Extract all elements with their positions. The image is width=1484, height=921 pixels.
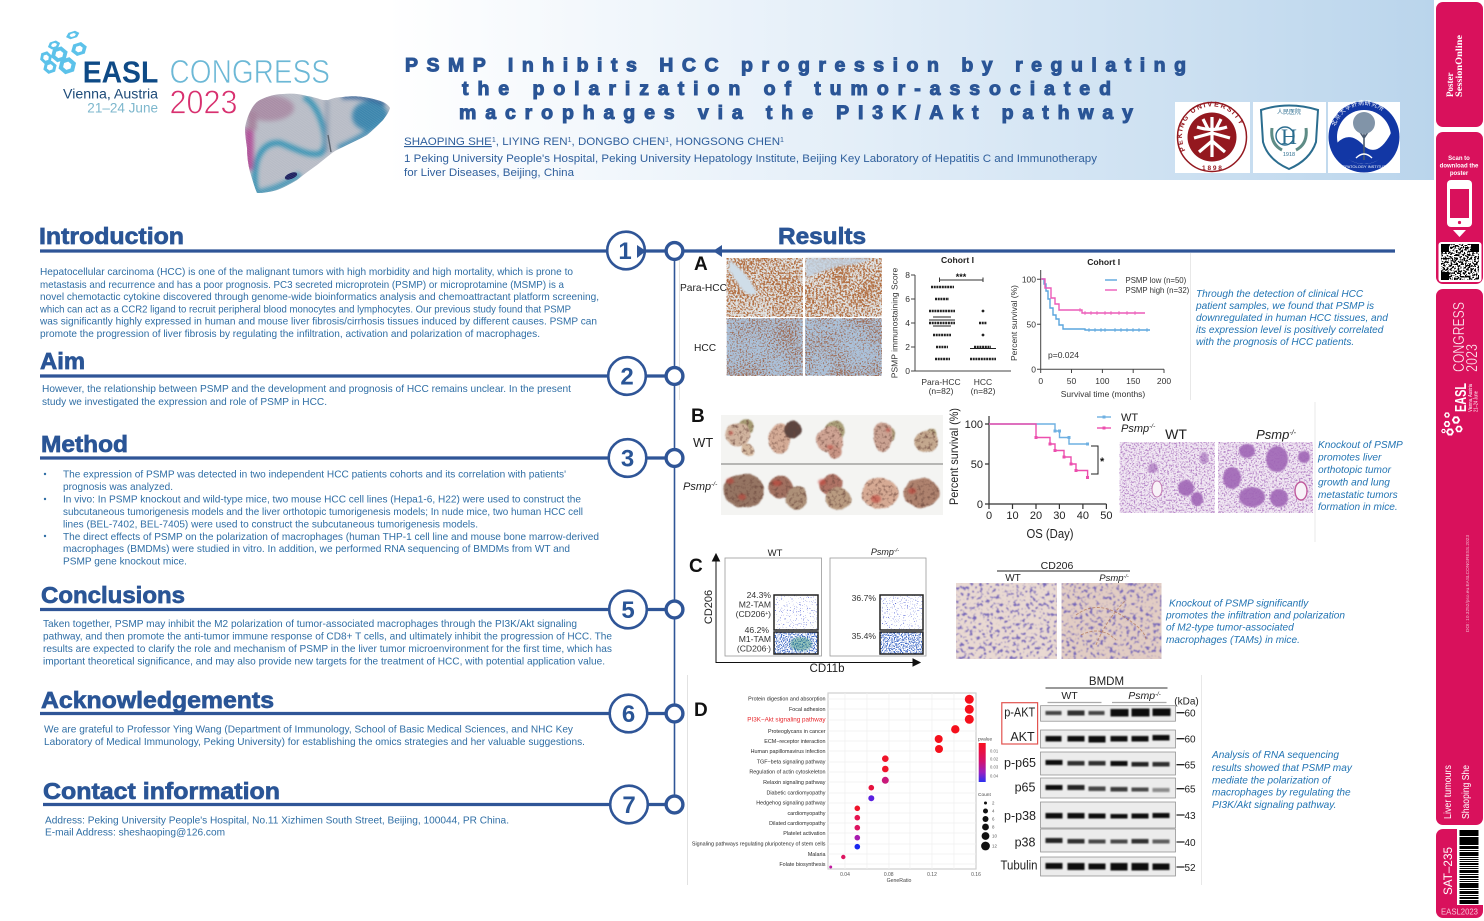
flow cytometry plots: ) — [768, 609, 771, 619]
survival chart: OS: -/- — [1149, 423, 1156, 430]
heading: conclusions: Conclusions — [41, 582, 185, 608]
IHC micrographs: Para-HCC — [680, 283, 727, 294]
sidebar panel: congress and session: Liver tumours — [1443, 765, 1454, 819]
p-p65 bands — [1046, 760, 1062, 765]
text: result A note: its expression level is positively correlated — [1196, 325, 1384, 336]
flow cytometry plots: Psmp — [871, 547, 894, 557]
CD206 micrographs: CD206 — [1041, 560, 1074, 572]
title: the polarization of tumor-associated — [462, 78, 1111, 100]
sidebar panel: congress and session: Vienna, Austria — [1468, 384, 1474, 412]
text: result C note: Knockout of PSMP significantly — [1169, 598, 1309, 610]
panel: aim — [40, 348, 571, 408]
survival chart: cohort I: p=0.024 — [1048, 350, 1079, 360]
panel: contact information — [43, 778, 509, 838]
panel: result A — [680, 253, 1388, 400]
text: method bullets: The expression of PSMP was detected in two independent HCC patients cohorts and its correlation with patients' — [63, 470, 566, 480]
text: conclusions body: pathway, and then promote the anti-tumor immune response of CD8+ T cells, and ultimately inhibit the progression of HCC. The — [43, 632, 612, 642]
CD206 micrographs: WT — [1005, 573, 1021, 584]
text: result A note — [1195, 289, 1388, 348]
KEGG bubble chart: Platelet activation — [783, 831, 826, 837]
dot plot: immunostaining score: *** — [956, 272, 967, 282]
text: result D note: PI3K/Akt signaling pathway. — [1212, 800, 1336, 811]
text: conclusions body: results are expected to clarify the role and mechanism of PSMP in the liver tumor microenvironment for the first time, which has — [43, 644, 612, 655]
survival chart: cohort I: 0 — [1038, 376, 1043, 386]
marker 2 — [608, 357, 683, 395]
CD206 micrographs — [956, 560, 1162, 659]
text: result D note: mediate the polarization of — [1212, 776, 1332, 786]
text: acknowledgements body: We are grateful to Professor Ying Wang (Department of Immunology, School of Basic Medical Sciences, and NHC Key — [44, 724, 574, 736]
survival chart: OS: 100 — [965, 419, 983, 431]
text: conclusions body — [43, 619, 612, 668]
dot plot: immunostaining score: Para-HCC — [921, 377, 961, 387]
western blots: p65 — [1015, 780, 1035, 794]
KEGG bubble chart: ECM−receptor interaction — [764, 739, 826, 745]
KEGG bubble chart: Diabetic cardiomyopathy — [766, 790, 826, 796]
survival chart: cohort I: 200 — [1157, 376, 1171, 386]
affiliation: for Liver Diseases, Beijing, China — [404, 167, 574, 179]
text: aim body — [42, 384, 571, 408]
western blots — [1000, 676, 1199, 876]
text: result B note: promotes liver — [1317, 452, 1382, 464]
authors: 1 — [492, 137, 496, 144]
connector lines and timeline — [40, 251, 1395, 804]
text: method bullets: prognosis was analyzed. — [63, 482, 173, 493]
marker 2: 2 — [620, 364, 634, 390]
flow cytometry plots: 35.4% — [852, 631, 876, 641]
text: result B note: formation in mice. — [1318, 502, 1398, 513]
lung histology — [1120, 426, 1313, 513]
western blots: WT — [1061, 690, 1078, 702]
authors: 1 — [780, 137, 784, 144]
KEGG bubble chart: Focal adhesion — [789, 707, 826, 713]
text: method bullets: In vivo: In PSMP knockout and wild-type mice, two mouse HCC cell lines (Hepa1-6, H22) were used to construct the — [63, 494, 581, 506]
text: result D note — [1211, 750, 1353, 811]
authors: SHAOPING SHE — [404, 136, 492, 148]
text: contact body: Address: Peking University People's Hospital, No.11 Xizhimen South Street, Beijing, 100044, PR China. — [45, 816, 509, 826]
sidebar panel: scan to download — [1436, 132, 1483, 284]
heading: contact information: Contact information — [43, 778, 280, 804]
survival chart: cohort I: 100 — [1022, 274, 1036, 284]
text: result B note: orthotopic tumor — [1318, 465, 1392, 476]
KEGG bubble chart: Count — [978, 792, 991, 798]
p38 bands — [1046, 838, 1062, 843]
flow cytometry plots: 24.3% — [747, 590, 771, 600]
western blots: Tubulin — [1000, 858, 1038, 872]
marker 1: 1 — [618, 238, 632, 265]
sidebar panel: congress and session: DOI: 10.3252/pso.eu.EASLCONGRESS.2023 — [1465, 535, 1470, 632]
dot plot: immunostaining score: 6 — [905, 294, 910, 304]
dot plot: immunostaining score: 0 — [905, 366, 910, 376]
sidebar panel: congress and session: EASL — [1453, 383, 1470, 412]
flow cytometry plots: - — [766, 646, 768, 652]
dot plot: immunostaining score: (n=82) — [971, 386, 996, 396]
KEGG bubble chart: Dilated cardiomyopathy — [769, 821, 826, 827]
marker 5 — [609, 591, 683, 628]
survival chart: cohort I: 50 — [1067, 376, 1076, 386]
AKT bands — [1046, 736, 1062, 742]
KEGG bubble chart: Malaria — [808, 852, 826, 858]
heading: introduction: Introduction — [39, 223, 184, 249]
flow cytometry plots: CD11b — [810, 663, 844, 675]
flow cytometry plots: -/- — [894, 548, 899, 554]
marker 5: 5 — [621, 597, 635, 624]
panel: result D — [688, 675, 1353, 885]
text: method bullets: The direct effects of PSMP on the polarization of macrophages (human THP-1 cell line and mouse bone marrow-derived — [63, 532, 599, 543]
sidebar panel: poster session online — [1436, 2, 1483, 127]
survival chart: OS: 10 — [1006, 510, 1019, 522]
text: method bullets — [44, 470, 599, 568]
title: macrophages via the PI3K/Akt pathway — [459, 102, 1133, 124]
text: result C note: macrophages (TAMs) in mice. — [1166, 635, 1300, 646]
panel: introduction — [39, 223, 599, 340]
icon: People's Hospital shield: 1918 — [1283, 152, 1295, 158]
western blots: BMDM — [1089, 676, 1124, 688]
EASL Congress logo: Vienna, Austria — [63, 86, 159, 101]
KEGG bubble chart: Human papillomavirus infection — [751, 749, 826, 755]
EASL Congress logo: 2023 — [170, 83, 238, 120]
icon: Hepatology Institute seal: HEPATOLOGY INSTITUTE — [1340, 164, 1389, 169]
text: result D note: macrophages by regulating the — [1212, 788, 1351, 798]
arrow: results pointer — [713, 245, 722, 257]
section markers — [607, 232, 683, 823]
label B: B — [691, 406, 705, 427]
survival chart: OS: 30 — [1053, 510, 1066, 522]
sidebar panel: scan to download: poster — [1450, 171, 1469, 177]
KEGG bubble chart: Signaling pathways regulating pluripotency of stem cells — [692, 842, 826, 848]
heading: results: Results — [778, 223, 866, 249]
text: contact body: E-mail Address: sheshaoping@126.com — [45, 828, 225, 838]
EASL Congress logo: EASL — [83, 54, 158, 90]
text: conclusions body: Taken together, PSMP may inhibit the M2 polarization of tumor-associated macrophages through the PI3K/Akt signaling — [43, 619, 577, 630]
text: result A note: with the prognosis of HCC patients. — [1196, 337, 1354, 348]
panel: conclusions — [41, 582, 612, 668]
flow cytometry plots: ) — [768, 644, 771, 654]
authors — [404, 136, 784, 148]
survival chart: cohort I — [1009, 257, 1190, 399]
KEGG bubble chart: 6 — [992, 816, 995, 822]
sidebar panel: poster number and barcode — [1436, 827, 1484, 918]
icon: phone — [1447, 180, 1472, 227]
p65 bands — [1046, 785, 1062, 790]
text: introduction body: metastasis and recurrence and has a poor prognosis. PC3 secreted microprotein (PSMP) or microprotamine (MSMP) is a — [40, 280, 564, 291]
marker 6: 6 — [622, 701, 635, 728]
text: introduction body: promote the progression of liver fibrosis by regulating the infiltration, activation and polarization of macrophages. — [40, 329, 540, 340]
p-AKT bands — [1046, 711, 1062, 715]
KEGG bubble chart: Regulation of actin cytoskeleton — [749, 770, 826, 776]
text: result C note — [1165, 598, 1345, 646]
survival chart: cohort I: PSMP high (n=32) — [1126, 286, 1190, 295]
EASL Congress logo: 21–24 June — [87, 100, 158, 115]
icon: People's Hospital shield: 人民医院 — [1277, 108, 1301, 116]
survival chart: cohort I: 50 — [1027, 320, 1036, 330]
western blots: Psmp — [1128, 690, 1155, 702]
flow cytometry plots: 46.2% — [745, 625, 769, 635]
survival chart: OS: 0 — [986, 510, 992, 522]
KEGG bubble chart: 4 — [992, 808, 995, 814]
icon: hexagon cluster — [38, 30, 89, 76]
text: acknowledgements body — [44, 724, 585, 748]
KEGG bubble chart: PI3K−Akt signaling pathway — [747, 716, 826, 724]
survival chart: cohort I: 150 — [1126, 376, 1141, 386]
text: result C note: of M2-type tumor-associated — [1166, 622, 1294, 634]
survival chart: OS: Percent survival (%) — [947, 408, 961, 505]
KEGG bubble chart: GeneRatio — [887, 878, 912, 884]
text: result B note: Knockout of PSMP — [1318, 440, 1403, 451]
survival chart: OS: OS (Day) — [1026, 527, 1074, 541]
KEGG bubble chart: 0.04 — [840, 872, 850, 878]
label C: C — [689, 556, 703, 577]
text: result D note: results showed that PSMP may — [1212, 763, 1353, 774]
tumor photographs: WT — [693, 435, 713, 450]
marker 7: 7 — [622, 792, 636, 819]
survival chart: OS: Psmp — [1121, 423, 1149, 435]
survival chart: OS: 50 — [971, 459, 983, 471]
icon: liver — [245, 94, 390, 193]
tubulin bands — [1046, 863, 1062, 869]
text: result C note: promotes the infiltration and polarization — [1165, 610, 1345, 622]
authors: 1 — [568, 137, 572, 144]
sidebar panel: scan to download: Scan to — [1448, 156, 1470, 162]
KEGG bubble chart: Protein digestion and absorption — [748, 696, 826, 702]
text: aim body: study we investigated the expression and role of PSMP in HCC. — [42, 397, 327, 408]
sidebar panel: congress and session — [1436, 289, 1483, 825]
dot plot: immunostaining score: 8 — [905, 270, 910, 280]
IHC micrographs: HCC — [694, 343, 716, 354]
lung histology: WT — [1165, 426, 1187, 442]
survival chart: OS: 20 — [1030, 510, 1042, 522]
lung histology: -/- — [1289, 430, 1297, 437]
flow cytometry plots: WT — [768, 548, 783, 559]
tumor photographs: -/- — [711, 481, 718, 488]
flow cytometry plots: M2-TAM — [739, 600, 771, 610]
text: introduction body: which can act as a CCR2 ligand to recruit peripheral blood monocytes and lymphocytes. Our previous study found that PSMP — [39, 304, 571, 316]
text: result A note: downregulated in human HCC tissues, and — [1196, 313, 1388, 324]
sidebar panel: congress and session: CONGRESS — [1451, 302, 1468, 372]
WT tumors — [726, 419, 938, 459]
icon: Hepatology Institute seal — [1328, 100, 1400, 173]
affiliation: 1 Peking University People's Hospital, Peking University Hepatology Institute, Beijing Key Laboratory of Hepatitis C and Immunotherapy — [404, 153, 1098, 165]
marker 6 — [610, 695, 683, 732]
western blots: 60 — [1184, 708, 1196, 720]
flow cytometry plots: (CD206 — [736, 609, 765, 619]
flow cytometry plots — [703, 547, 926, 675]
marker 3: 3 — [621, 446, 634, 472]
western blots: 52 — [1184, 863, 1196, 874]
icon: Peking University seal: PEKING UNIVERSITY — [1178, 102, 1244, 152]
text: introduction body: was significantly highly expressed in human and mouse liver fibrosis/cirrhosis tissues induced by different causes. PSMP can — [39, 316, 597, 328]
western blots: p-p65 — [1004, 756, 1036, 770]
text: method bullets: PSMP gene knockout mice. — [63, 556, 187, 568]
authors: , DONGBO CHEN — [572, 136, 665, 148]
panel: method — [41, 431, 599, 568]
IHC micrographs — [680, 258, 882, 376]
panel: acknowledgements — [41, 687, 585, 748]
authors: , HONGSONG CHEN — [669, 136, 780, 148]
dot plot: immunostaining score: Cohort I — [941, 255, 974, 265]
label D: D — [694, 700, 708, 721]
western blots: -/- — [1155, 692, 1161, 698]
text: result B note: growth and lung — [1318, 478, 1390, 488]
survival chart: cohort I: Cohort I — [1087, 257, 1120, 267]
survival chart: cohort I: PSMP low (n=50) — [1126, 276, 1187, 285]
western blots: 65 — [1184, 760, 1196, 772]
text: acknowledgements body: Laboratory of Medical Immunology, Peking University) for establishing the omics strategies and her valuable suggestions. — [44, 737, 585, 748]
survival chart: cohort I: Survival time (months) — [1061, 389, 1145, 399]
icon: People's Hospital shield: H — [1281, 124, 1297, 149]
text: result A note: Through the detection of clinical HCC — [1196, 289, 1364, 300]
dot plot: immunostaining score: PSMP immunostaining Score — [890, 268, 900, 378]
KEGG bubble chart: Relaxin signaling pathway — [763, 780, 826, 786]
survival chart: OS: * — [1100, 456, 1105, 468]
tumor photographs: Psmp — [683, 481, 711, 493]
KEGG bubble chart: Hedgehog signaling pathway — [756, 800, 826, 806]
icon: Peking University seal: 1 8 9 8 — [1202, 165, 1222, 172]
western blots: 65 — [1184, 784, 1196, 796]
sidebar — [1436, 2, 1484, 918]
KEGG bubble chart: Proteoglycans in cancer — [768, 729, 826, 735]
sidebar panel: poster number and barcode: EASL2023 — [1441, 908, 1478, 916]
survival chart: OS: 40 — [1077, 510, 1089, 522]
KEGG bubble chart: pvalue — [978, 736, 992, 742]
affiliation — [404, 153, 1098, 179]
header band — [0, 0, 1434, 180]
EASL Congress logo — [38, 30, 330, 120]
text: result D note: Analysis of RNA sequencing — [1211, 750, 1339, 761]
KEGG bubble chart: TGF−beta signaling pathway — [757, 760, 826, 766]
icon: Hepatology Institute seal: 北京大学肝病研究所 — [1332, 100, 1384, 126]
heading: acknowledgements: Acknowledgements — [41, 687, 274, 713]
text: aim body: However, the relationship between PSMP and the development and prognosis of HCC remains unclear. In the present — [42, 384, 571, 395]
flow cytometry plots: 36.7% — [852, 593, 876, 603]
text: method bullets: subcutaneous tumorigenesis models and the liver orthotopic tumorigenesis models; In nude mice, two human HCC cell — [63, 507, 583, 518]
QR code — [1438, 242, 1482, 282]
sidebar panel: congress and session: Shaoping She — [1461, 765, 1472, 819]
marker 7 — [610, 786, 683, 823]
text: result B note: metastatic tumors — [1318, 490, 1398, 501]
tumor photographs — [683, 415, 943, 515]
KEGG bubble chart — [692, 693, 999, 884]
icon: down triangle — [1453, 230, 1466, 237]
KEGG bubble chart: 2 — [992, 800, 995, 806]
western blots: p-AKT — [1004, 706, 1036, 720]
survival chart: cohort I: 0 — [1031, 364, 1036, 374]
marker 1 — [607, 232, 683, 269]
western blots: 60 — [1184, 734, 1196, 746]
dot plot: immunostaining score: HCC — [974, 377, 992, 387]
survival chart: cohort I: 100 — [1095, 376, 1110, 386]
CD206 micrographs: -/- — [1124, 574, 1129, 580]
panel: result B — [683, 402, 1403, 542]
western blots: 40 — [1184, 838, 1196, 849]
flow cytometry plots: + — [765, 611, 768, 617]
sidebar panel: poster session online: SessionOnline — [1454, 34, 1465, 97]
text: method bullets: macrophages (BMDMs) were studied in vitro. In addition, we performed RNA sequencing of BMDMs from WT and — [63, 544, 570, 555]
dot plot: immunostaining score: 2 — [905, 342, 910, 352]
text: introduction body: novel chemotactic cytokine discovered through genome-wide bioinformatics analysis and chemoattractant platform screening, — [40, 292, 599, 303]
western blots: p-p38 — [1004, 809, 1036, 823]
KEGG bubble chart: 0.08 — [884, 872, 894, 878]
KEGG bubble chart: 10 — [992, 834, 997, 838]
KEGG bubble chart: 12 — [992, 844, 997, 848]
sidebar panel: congress and session: 21–24 June — [1474, 391, 1480, 412]
KEGG bubble chart: 0.12 — [927, 872, 937, 878]
survival chart: OS: 50 — [1100, 510, 1113, 522]
flow cytometry plots: M1-TAM — [739, 634, 771, 644]
sidebar panel: poster number and barcode: SAT–235 — [1441, 847, 1455, 895]
EASL Congress logo: CONGRESS — [170, 53, 330, 90]
text: result B note — [1317, 440, 1403, 513]
western blots: p38 — [1015, 836, 1035, 850]
dot plot: immunostaining score: (n=82) — [929, 386, 954, 396]
flow cytometry plots: (CD206 — [737, 644, 766, 654]
label A: A — [694, 254, 708, 275]
sidebar panel: scan to download: download the — [1440, 164, 1479, 170]
text: result A note: patient samples, we found that PSMP is — [1195, 301, 1374, 312]
survival chart: OS: 0 — [977, 499, 983, 511]
heading: method: Method — [41, 431, 128, 457]
title — [405, 54, 1186, 124]
western blots: 43 — [1184, 811, 1196, 822]
panel: result C — [689, 547, 1345, 675]
western blots: AKT — [1010, 730, 1035, 744]
KEGG bubble chart: cardiomyopathy — [787, 811, 826, 817]
KEGG bubble chart: 0.04 — [990, 774, 999, 778]
survival chart: cohort I: Percent survival (%) — [1009, 285, 1019, 361]
western blots: (kDa) — [1174, 696, 1199, 708]
icon: Peking University seal — [1175, 102, 1250, 173]
lung histology: Psmp — [1256, 427, 1289, 442]
text: introduction body: Hepatocellular carcinoma (HCC) is one of the malignant tumors with high morbidity and high mortality, which is prone to — [40, 267, 573, 278]
authors: , LIYING REN — [496, 136, 568, 148]
KEGG bubble chart: 8 — [992, 824, 995, 830]
sidebar panel: congress and session: 2023 — [1464, 344, 1481, 372]
logos: institution seals — [1175, 100, 1400, 173]
survival chart: OS — [947, 408, 1156, 541]
KEGG bubble chart: 0.16 — [971, 872, 981, 878]
authors: 1 — [665, 137, 669, 144]
text: conclusions body: important theoretical significance, and may also provide new targets for the treatment of HCC, with potential application value. — [43, 656, 605, 668]
KEGG bubble chart: 0.02 — [990, 756, 999, 762]
p-p38 bands — [1046, 813, 1062, 818]
sidebar panel: poster session online: Poster — [1445, 72, 1455, 97]
flow cytometry plots: CD206 — [703, 590, 715, 624]
marker 3 — [609, 439, 683, 477]
KEGG bubble chart: 0.03 — [990, 764, 999, 770]
text: contact body — [45, 816, 509, 838]
CD206 micrographs: Psmp — [1099, 573, 1124, 584]
KEGG bubble chart: 0.01 — [990, 748, 999, 754]
Psmp tumors — [724, 473, 939, 511]
title: PSMP Inhibits HCC progression by regulating — [405, 54, 1186, 76]
dot plot: immunostaining score — [890, 255, 1011, 396]
text: method bullets: lines (BEL-7402, BEL-7405) were used to construct the subcutaneous tumorigenesis models. — [63, 520, 478, 530]
KEGG bubble chart: Folate biosynthesis — [779, 862, 826, 868]
icon: People's Hospital shield — [1253, 102, 1326, 173]
heading: aim: Aim — [40, 348, 85, 374]
dot plot: immunostaining score: 4 — [905, 318, 910, 328]
icon: hexagons — [1441, 412, 1463, 435]
text: introduction body — [39, 267, 599, 340]
survival chart: OS: WT — [1121, 412, 1138, 424]
